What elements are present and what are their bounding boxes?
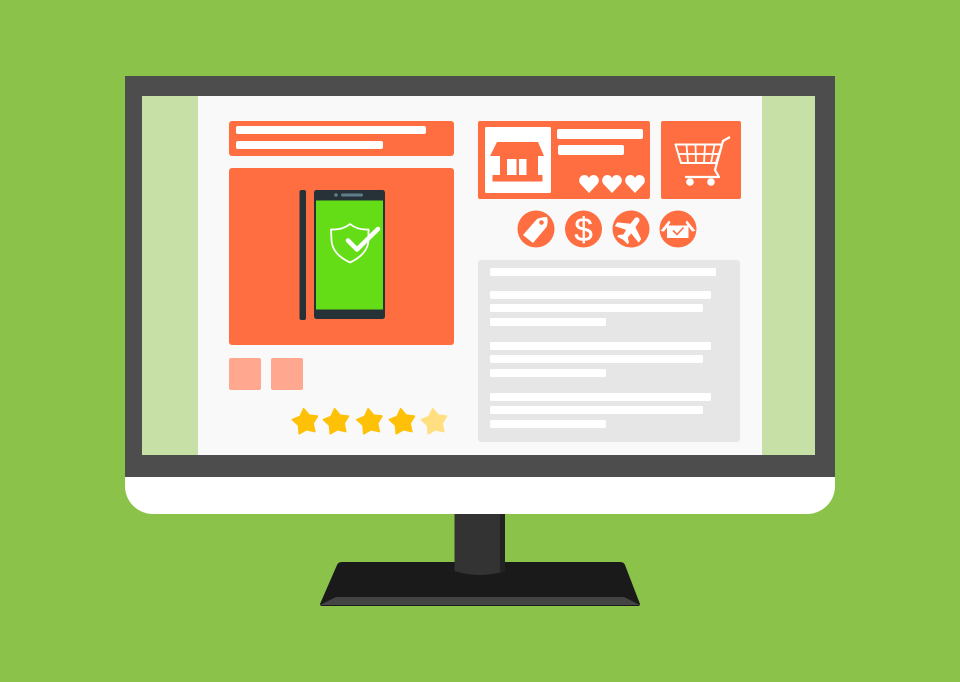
thumbnails	[229, 358, 303, 390]
icon: price tag	[518, 210, 554, 248]
header panel	[229, 121, 454, 156]
phone front view	[314, 190, 385, 319]
icon: hearts	[579, 175, 645, 193]
monitor stand	[320, 510, 640, 606]
icon: airplane	[611, 209, 650, 249]
icon: dollar	[565, 210, 602, 248]
screen	[142, 96, 815, 455]
text placeholder lines	[490, 268, 716, 428]
phone side view	[300, 190, 306, 320]
cart panel	[661, 121, 741, 199]
shop panel	[478, 121, 650, 199]
monitor chin	[125, 470, 835, 514]
icon: dollar: $	[574, 211, 593, 248]
right side band	[762, 96, 815, 455]
left side band	[142, 96, 198, 455]
icon: storefront	[490, 142, 544, 182]
icon: shield with check mark	[331, 224, 378, 262]
product panel with phone	[229, 168, 454, 345]
description panel	[478, 260, 740, 442]
icon: box with check	[660, 210, 696, 248]
monitor frame	[125, 76, 835, 477]
star rating	[291, 407, 449, 435]
icon: shopping cart	[676, 137, 730, 186]
